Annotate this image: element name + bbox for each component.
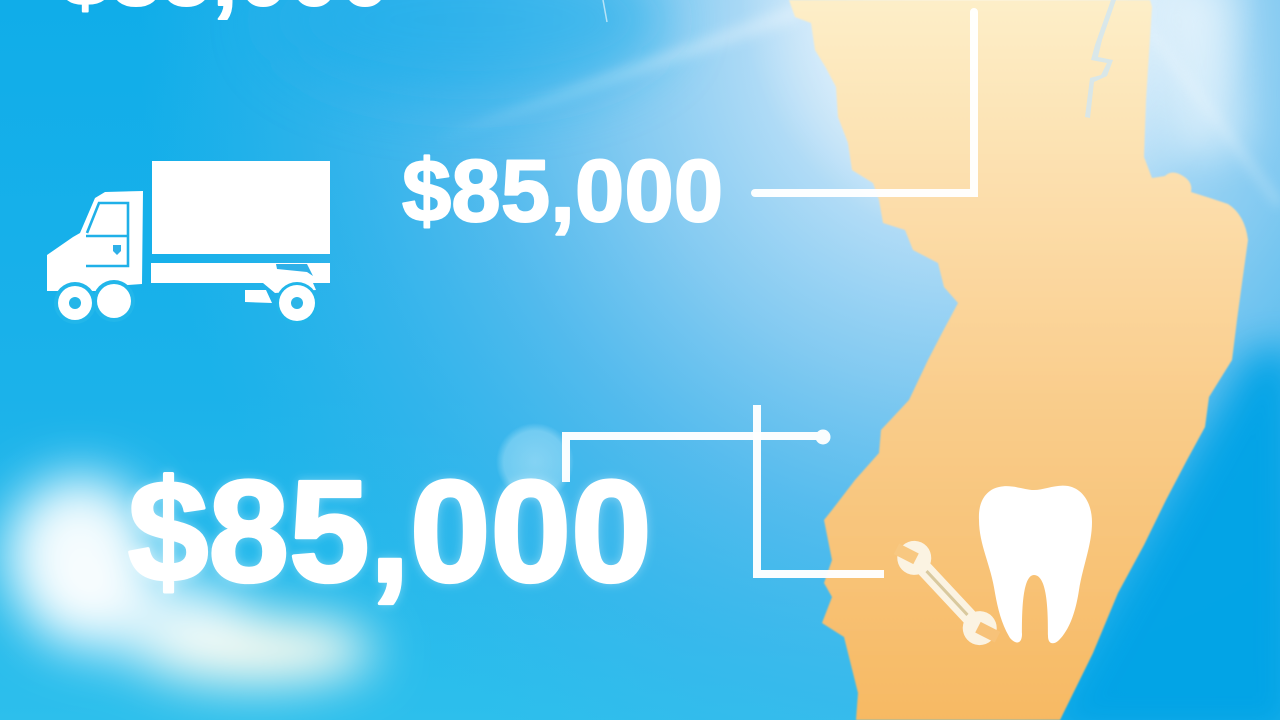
truck front wheel — [58, 286, 92, 320]
connector: vertical to wrench — [757, 405, 884, 574]
truck middle wheel — [97, 284, 131, 318]
truck wheel arches — [54, 280, 318, 324]
connector: middle value to map — [755, 12, 974, 193]
map shape — [789, 0, 1248, 720]
sun rays — [430, 0, 1280, 205]
truck cab — [47, 191, 143, 291]
truck mudflap — [245, 290, 272, 303]
truck chassis — [151, 263, 330, 293]
connector: large value to dot — [566, 430, 830, 482]
truck cargo box — [152, 161, 330, 254]
truck cab outlines — [86, 203, 128, 266]
icon: wrench — [888, 531, 1006, 655]
icon: truck — [47, 161, 330, 324]
truck door handle — [113, 245, 121, 255]
truck tail vent — [276, 264, 313, 276]
lens flare — [496, 423, 574, 501]
lake inlet on map — [1085, 0, 1116, 118]
icon: tooth — [979, 486, 1092, 643]
cloud — [5, 475, 375, 684]
large value: $85,000 — [128, 450, 652, 612]
truck rear wheel — [279, 285, 315, 321]
middle value: $85,000 — [402, 141, 723, 240]
